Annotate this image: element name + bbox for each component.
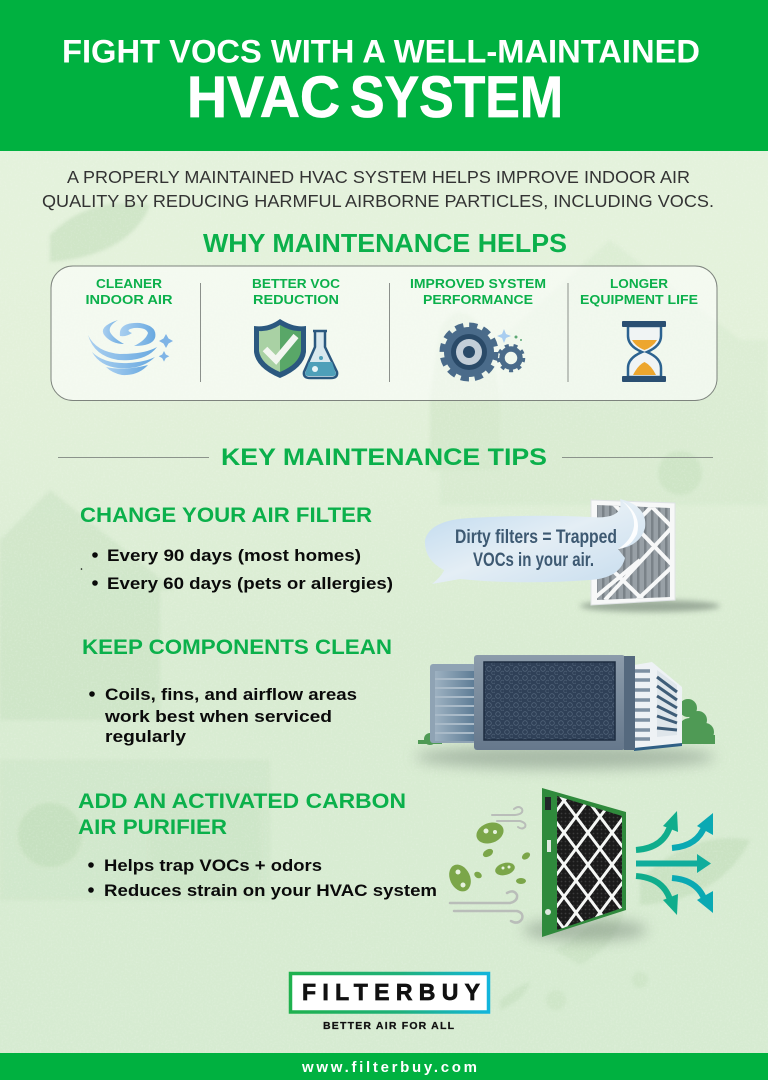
title: HVAC xyxy=(187,65,340,130)
callout: dirty filters: VOCs in your air. xyxy=(473,550,594,571)
benefit: better VOC reduction: BETTER VOC xyxy=(252,276,341,291)
heading: why maintenance helps: WHY MAINTENANCE HELPS xyxy=(203,228,567,258)
title: FIGHT VOCS WITH A WELL-MAINTAINED xyxy=(62,34,700,70)
tip 2: keep components clean: Coils, fins, and airflow areas xyxy=(105,686,357,704)
intro paragraph: A PROPERLY MAINTAINED HVAC SYSTEM HELPS IMPROVE INDOOR AIR xyxy=(67,167,690,187)
title xyxy=(62,34,700,130)
benefit: improved system performance: PERFORMANCE xyxy=(423,292,533,307)
intro paragraph xyxy=(42,167,714,211)
benefit: better VOC reduction: REDUCTION xyxy=(253,292,339,307)
icon: outgoing air arrows xyxy=(636,811,713,915)
title: SYSTEM xyxy=(350,65,563,130)
callout: dirty filters: Dirty filters = Trapped xyxy=(455,527,617,548)
logo: BETTER AIR FOR ALL xyxy=(323,1020,455,1032)
illustration: carbon filter with airflow xyxy=(445,788,716,941)
benefit: cleaner indoor air: INDOOR AIR xyxy=(86,292,173,307)
icon: particles xyxy=(445,819,531,895)
benefit: better VOC reduction xyxy=(252,276,341,378)
tip 1: change your air filter xyxy=(80,504,393,593)
icon: shield and flask xyxy=(254,319,337,378)
tip 1: change your air filter: Every 90 days (most homes) xyxy=(107,547,361,565)
logo xyxy=(290,974,488,1032)
tip 3: activated carbon air purifier: Reduces strain on your HVAC system xyxy=(104,882,437,900)
tip 3: activated carbon air purifier: AIR PURIFIER xyxy=(78,816,227,839)
footer bar: www.filterbuy.com xyxy=(301,1059,477,1076)
panel: benefits xyxy=(51,266,717,400)
icon: incoming wind xyxy=(450,807,525,923)
benefit: longer equipment life: LONGER xyxy=(610,276,669,291)
icon: gears xyxy=(443,326,524,378)
intro paragraph: QUALITY BY REDUCING HARMFUL AIRBORNE PARTICLES, INCLUDING VOCS. xyxy=(42,191,714,211)
illustration: pleated filter with speech bubble xyxy=(425,499,720,612)
tip 3: activated carbon air purifier: Helps trap VOCs + odors xyxy=(104,857,322,875)
benefit: cleaner indoor air xyxy=(86,276,173,375)
logo: FILTERBUY xyxy=(302,979,480,1005)
benefit: longer equipment life xyxy=(580,276,698,382)
illustration: HVAC unit xyxy=(415,655,715,769)
benefit: longer equipment life: EQUIPMENT LIFE xyxy=(580,292,698,307)
tip 1: change your air filter: Every 60 days (pets or allergies) xyxy=(107,575,393,593)
tip 2: keep components clean xyxy=(82,636,392,746)
icon: air swirl xyxy=(88,320,173,375)
icon: hourglass xyxy=(622,321,666,382)
tip 2: keep components clean: KEEP COMPONENTS CLEAN xyxy=(82,636,392,659)
heading: key maintenance tips: KEY MAINTENANCE TIPS xyxy=(221,444,547,471)
benefit: improved system performance xyxy=(410,276,546,378)
tip 2: keep components clean: work best when serviced xyxy=(104,708,332,726)
tip 3: activated carbon air purifier xyxy=(78,790,437,900)
benefit: improved system performance: IMPROVED SYSTEM xyxy=(410,276,546,291)
callout: dirty filters xyxy=(425,499,645,584)
benefit: cleaner indoor air: CLEANER xyxy=(96,276,163,291)
tip 3: activated carbon air purifier: ADD AN ACTIVATED CARBON xyxy=(78,790,406,813)
icon: carbon filter xyxy=(542,788,626,937)
footer bar xyxy=(0,1053,768,1080)
tip 2: keep components clean: regularly xyxy=(105,728,187,746)
tip 1: change your air filter: CHANGE YOUR AIR FILTER xyxy=(80,504,372,527)
header banner xyxy=(0,0,768,151)
